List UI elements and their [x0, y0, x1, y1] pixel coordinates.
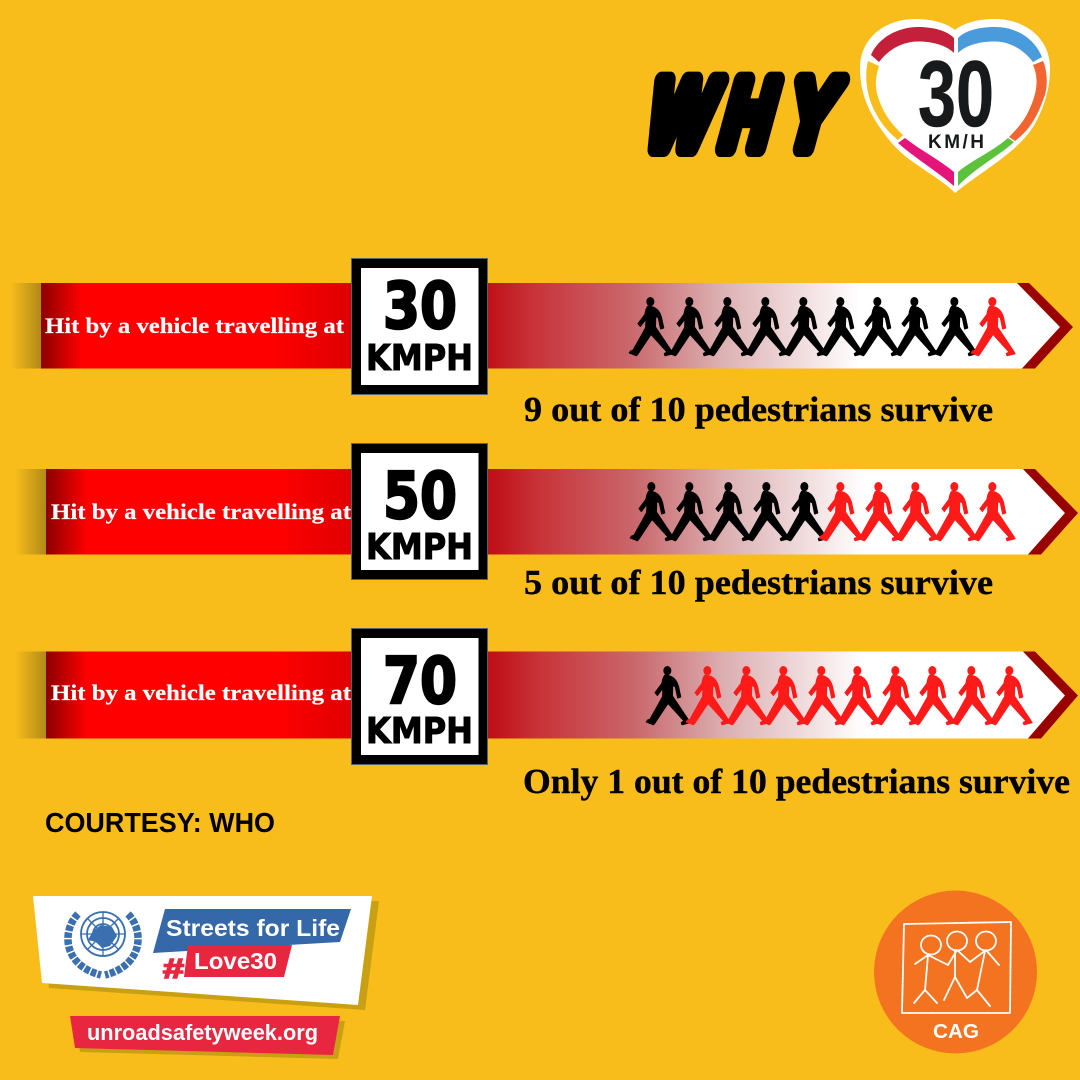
icon: UN emblem — [68, 912, 138, 975]
speed sign: 30 KMPH — [352, 258, 488, 394]
pictogram: 1 of 10 pedestrians survive — [646, 666, 1032, 725]
heading: WHY: W — [643, 60, 726, 169]
speed sign: 50 KMPH — [352, 444, 488, 580]
arrow band: 70 KMPH — [15, 652, 1078, 738]
logo panel: UN Streets for Life — [33, 896, 379, 1010]
logo panel: UN Streets for Life: Streets for Life — [166, 915, 340, 941]
label: hit by a vehicle, row 1: Hit by a vehicle travelling at — [45, 313, 345, 338]
logo: CAG: CAG — [933, 1021, 979, 1043]
speed sign: 70 KMPH: KMPH — [366, 711, 473, 752]
speed sign: 70 KMPH — [352, 628, 488, 764]
logo panel: UN Streets for Life: # — [163, 953, 185, 984]
text: 5 out of 10 survive: 5 out of 10 pedestrians survive — [524, 563, 993, 602]
logo panel: UN Streets for Life: Love30 — [194, 948, 277, 974]
url banner: unroadsafetyweek.org — [87, 1020, 318, 1045]
text: courtesy WHO: COURTESY: WHO — [45, 807, 275, 838]
heading: WHY: H — [717, 60, 782, 169]
label: hit by a vehicle, row 3: Hit by a vehicle travelling at — [51, 680, 352, 705]
speed sign: 70 KMPH: 70 — [383, 645, 457, 719]
speed sign: 50 KMPH: 50 — [383, 460, 457, 534]
icon: 30 km/h heart logo: 30 — [918, 41, 994, 146]
arrow band: 50 KMPH — [15, 469, 1078, 554]
logo: CAG — [874, 890, 1037, 1054]
text: only 1 out of 10 survive: Only 1 out of 10 pedestrians survive — [523, 762, 1070, 801]
label: hit by a vehicle, row 2: Hit by a vehicle travelling at — [51, 499, 352, 524]
pictogram: 9 of 10 pedestrians survive — [629, 297, 1015, 356]
icon: 30 km/h heart logo — [860, 19, 1050, 193]
speed sign: 50 KMPH: KMPH — [366, 527, 473, 568]
speed sign: 30 KMPH: 30 — [383, 270, 457, 344]
heading: WHY — [643, 60, 847, 169]
url banner — [70, 1016, 345, 1059]
heading: WHY: Y — [782, 60, 847, 169]
icon: 30 km/h heart logo: KM/H — [928, 132, 984, 153]
speed sign: 30 KMPH: KMPH — [366, 338, 473, 379]
text: 9 out of 10 survive: 9 out of 10 pedestrians survive — [524, 390, 993, 429]
pictogram: 5 of 10 pedestrians survive — [630, 482, 1015, 541]
arrow band: 30 KMPH — [10, 283, 1073, 368]
